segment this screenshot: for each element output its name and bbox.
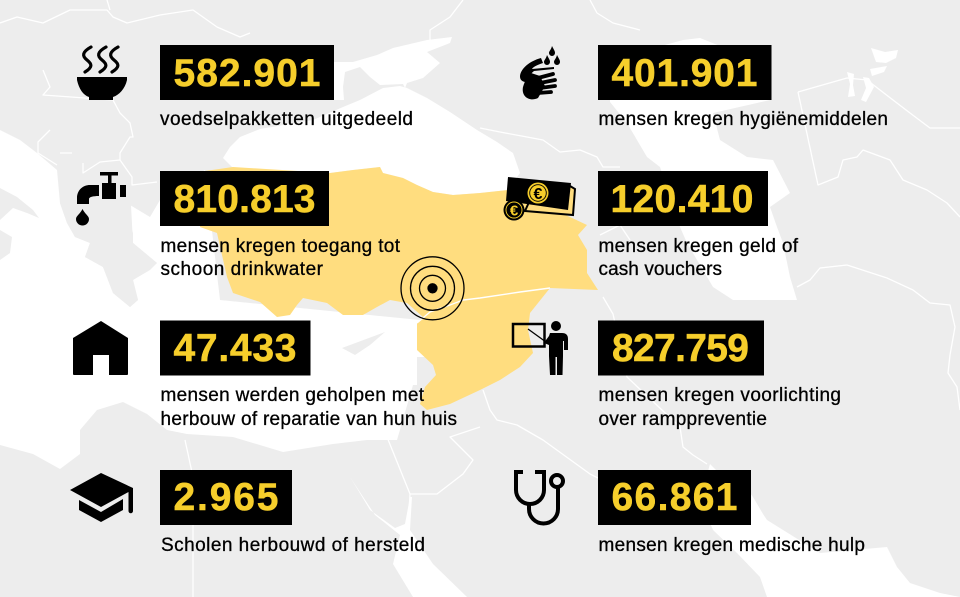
stat: cash (504, 171, 799, 280)
label: herbouw of reparatie van hun huis (160, 409, 457, 430)
number: 582.901 (174, 52, 320, 95)
number: 47.433 (174, 327, 296, 370)
label: schoon drinkwater (160, 259, 324, 280)
label (598, 385, 841, 430)
mediterranean and aegean (0, 130, 435, 469)
label: cash vouchers (598, 259, 722, 280)
label: over ramppreventie (598, 409, 767, 430)
stat: food parcels (77, 45, 413, 130)
label (160, 385, 457, 430)
number: 66.861 (612, 476, 738, 519)
stat: medical care (516, 470, 865, 556)
label: mensen kregen medische hulp (598, 535, 865, 556)
label (598, 236, 799, 280)
label: mensen werden geholpen met (160, 385, 425, 406)
icon: washing hands (520, 46, 560, 99)
stat: housing (73, 320, 457, 430)
highlighted area: turkey and syria (200, 167, 598, 410)
icon: house (73, 321, 128, 375)
stat: schools (70, 470, 425, 556)
aral sea (847, 48, 898, 102)
number box (598, 45, 772, 100)
icon: soup bowl (77, 47, 127, 100)
label: mensen kregen hygiënemiddelen (598, 109, 888, 130)
icon: earthquake epicentre (401, 257, 464, 320)
caspian sea (610, 38, 797, 300)
stat: drinking water (76, 171, 401, 280)
icon: tap with drop (76, 172, 126, 226)
persian gulf (700, 464, 960, 597)
stat: disaster education (513, 320, 841, 430)
label: mensen kregen geld of (598, 236, 799, 257)
number box (598, 470, 751, 525)
icon: banknotes and coins: € (534, 186, 543, 203)
number: 2.965 (174, 476, 278, 519)
black sea (223, 86, 520, 195)
number: 401.901 (612, 52, 758, 95)
number box (598, 320, 764, 376)
number: 120.410 (610, 178, 754, 221)
sea of azov (334, 37, 452, 100)
icon: banknotes and coins: € (510, 202, 519, 220)
label (160, 236, 401, 280)
icon: stethoscope (516, 472, 563, 524)
red sea (350, 477, 467, 597)
icon: graduation cap (70, 473, 133, 522)
icon: presenter at board (513, 321, 568, 375)
number: 810.813 (174, 178, 316, 221)
icon: banknotes and coins (504, 177, 575, 220)
italy, greece, cyprus and lebanon land (0, 175, 436, 387)
label: voedselpakketten uitgedeeld (160, 109, 413, 130)
number box (598, 171, 768, 226)
turkey-syria border (417, 288, 550, 323)
label: mensen kregen toegang tot (160, 236, 401, 257)
number box (160, 171, 329, 226)
number: 827.759 (612, 327, 749, 370)
stat: hygiene (520, 45, 888, 130)
number box (160, 45, 334, 100)
label: Scholen herbouwd of hersteld (161, 535, 425, 556)
number box (160, 320, 310, 376)
label: mensen kregen voorlichting (598, 385, 841, 406)
number box (160, 470, 292, 525)
